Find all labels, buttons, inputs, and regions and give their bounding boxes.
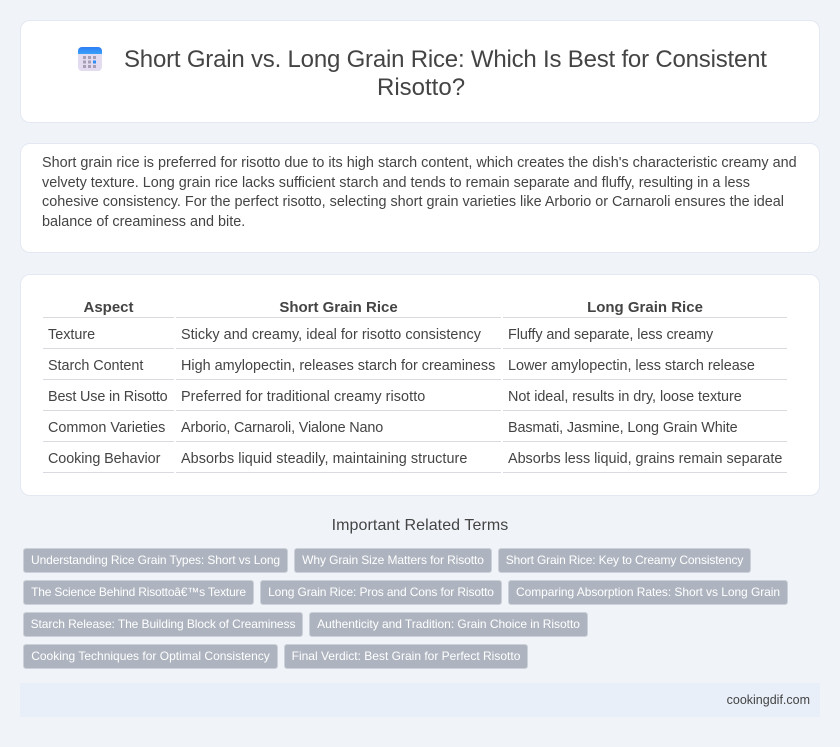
comparison table: Short Grain Rice [279, 299, 398, 316]
related terms chips: Why Grain Size Matters for Risotto [302, 553, 484, 567]
footer source: cookingdif.com [727, 693, 810, 707]
comparison table: Arborio, Carnaroli, Vialone Nano [181, 420, 383, 436]
related terms chips: Starch Release: The Building Block of Creaminess [31, 617, 295, 631]
related terms chips: Comparing Absorption Rates: Short vs Long Grain [516, 585, 780, 599]
related terms chips: Short Grain Rice: Key to Creamy Consistency [506, 553, 743, 567]
related terms chips: Understanding Rice Grain Types: Short vs Long [31, 553, 280, 567]
intro text: cohesive consistency. For the perfect risotto, selecting short grain varieties like Arborio or Carnaroli ensures the ideal [42, 194, 784, 210]
intro text: balance of creaminess and bite. [42, 214, 245, 230]
comparison table card [20, 274, 820, 496]
related terms chips: The Science Behind Risottoâ€™s Texture [31, 585, 246, 599]
related terms chips: Authenticity and Tradition: Grain Choice in Risotto [317, 617, 580, 631]
comparison table: Preferred for traditional creamy risotto [181, 389, 425, 405]
comparison table: Aspect [83, 299, 134, 316]
related terms chips: Cooking Techniques for Optimal Consistency [31, 649, 270, 663]
comparison table: Texture [48, 327, 95, 343]
title: Risotto? [377, 74, 465, 101]
related terms chips: Final Verdict: Best Grain for Perfect Risotto [292, 649, 520, 663]
header card [20, 20, 820, 123]
comparison table [43, 299, 787, 473]
comparison table: Starch Content [48, 358, 143, 374]
comparison table: High amylopectin, releases starch for creaminess [181, 358, 495, 374]
footer bar [20, 683, 820, 717]
icon: calendar [78, 47, 102, 71]
comparison table: Absorbs liquid steadily, maintaining structure [181, 451, 467, 467]
intro text: Short grain rice is preferred for risotto due to its high starch content, which creates the dish's characteristic creamy and [42, 155, 797, 171]
intro paragraph card [20, 143, 820, 253]
comparison table: Not ideal, results in dry, loose texture [508, 389, 742, 405]
related terms chips: Long Grain Rice: Pros and Cons for Risotto [268, 585, 494, 599]
comparison table: Cooking Behavior [48, 451, 160, 467]
title [124, 46, 767, 101]
related terms heading: Important Related Terms [332, 517, 508, 534]
intro text [42, 155, 797, 230]
title: Short Grain vs. Long Grain Rice: Which Is Best for Consistent [124, 46, 767, 73]
comparison table: Long Grain Rice [587, 299, 703, 316]
comparison table: Sticky and creamy, ideal for risotto consistency [181, 327, 481, 343]
related terms chips [23, 548, 788, 669]
comparison table: Fluffy and separate, less creamy [508, 327, 713, 343]
comparison table: Best Use in Risotto [48, 389, 168, 405]
comparison table: Basmati, Jasmine, Long Grain White [508, 420, 737, 436]
intro text: velvety texture. Long grain rice lacks sufficient starch and tends to remain separate and fluffy, resulting in a less [42, 175, 750, 191]
comparison table: Lower amylopectin, less starch release [508, 358, 755, 374]
comparison table: Common Varieties [48, 420, 165, 436]
comparison table: Absorbs less liquid, grains remain separate [508, 451, 782, 467]
